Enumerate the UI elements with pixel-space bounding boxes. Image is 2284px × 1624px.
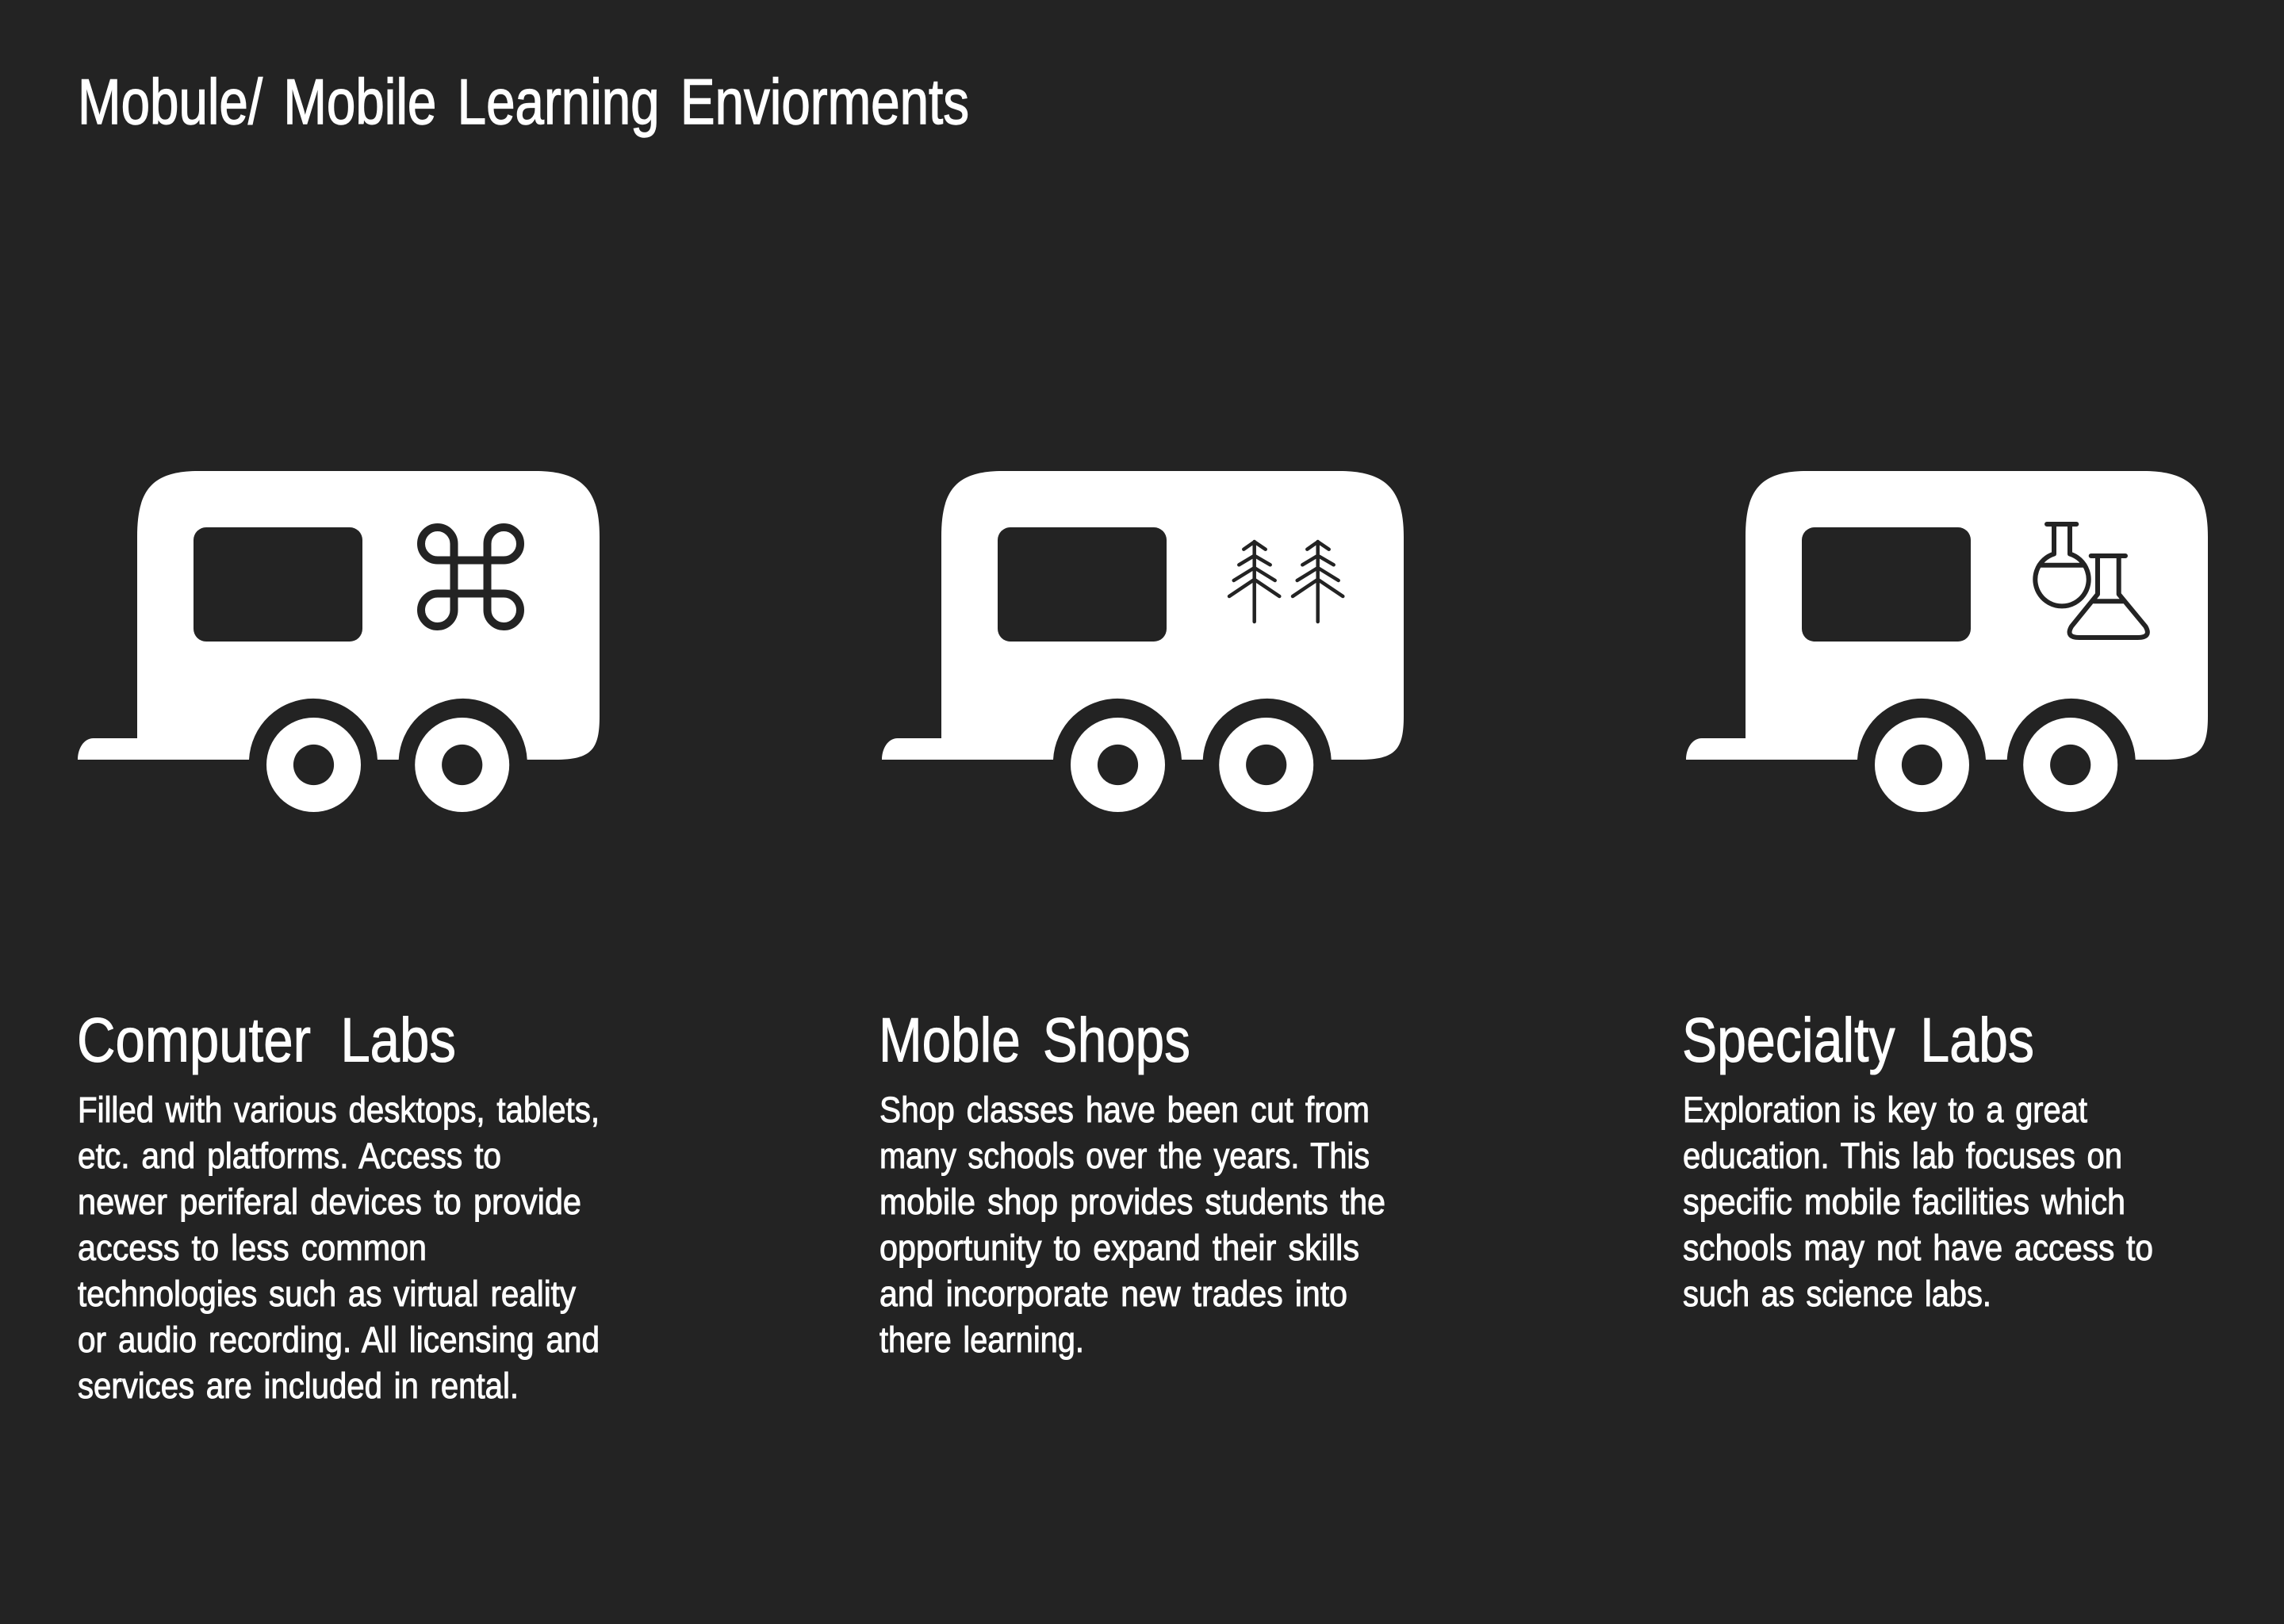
heading: moble shops: Moble Shops <box>879 1004 1190 1075</box>
text: specialty labs description: education. This lab focuses on <box>1683 1136 2122 1176</box>
panel: mobile shops <box>879 471 1404 1360</box>
panel: specialty labs <box>1682 471 2208 1314</box>
icon: trailer <box>1686 471 2208 812</box>
text: moble shops description: and incorporate new trades into <box>879 1274 1347 1314</box>
text: specialty labs description: schools may not have access to <box>1683 1228 2153 1268</box>
heading: specialty labs: Specialty Labs <box>1682 1004 2034 1075</box>
panel: computer labs <box>77 471 600 1406</box>
text: computer labs description: technologies such as virtual reality <box>78 1274 576 1314</box>
text: specialty labs description: specific mobile facilities which <box>1683 1182 2125 1222</box>
text: computer labs description: access to less common <box>78 1228 427 1268</box>
text: computer labs description: services are included in rental. <box>78 1365 519 1406</box>
icon: command symbol <box>421 527 520 626</box>
text: moble shops description: mobile shop provides students the <box>879 1182 1385 1222</box>
icon: lab flasks <box>2035 524 2148 638</box>
text: specialty labs description <box>1683 1090 2153 1314</box>
heading: computer labs: Computer Labs <box>77 1004 456 1075</box>
text: moble shops description <box>879 1090 1385 1360</box>
text: moble shops description: there learning. <box>879 1320 1084 1360</box>
text: moble shops description: many schools over the years. This <box>879 1136 1370 1176</box>
icon: trailer <box>882 471 1404 812</box>
text: moble shops description: opportunity to expand their skills <box>879 1228 1359 1268</box>
text: computer labs description <box>78 1090 600 1406</box>
text: computer labs description: or audio recording. All licensing and <box>78 1320 600 1360</box>
title: Mobule/ Mobile Learning Enviorments <box>78 67 969 138</box>
text: computer labs description: Filled with various desktops, tablets, <box>78 1090 600 1130</box>
text: computer labs description: newer periferal devices to provide <box>78 1182 581 1222</box>
icon: pine trees <box>1229 542 1343 622</box>
text: moble shops description: Shop classes have been cut from <box>879 1090 1370 1130</box>
text: specialty labs description: such as science labs. <box>1683 1274 1991 1314</box>
text: specialty labs description: Exploration is key to a great <box>1683 1090 2087 1130</box>
icon: trailer <box>78 471 600 812</box>
text: computer labs description: etc. and platforms. Access to <box>78 1136 501 1176</box>
